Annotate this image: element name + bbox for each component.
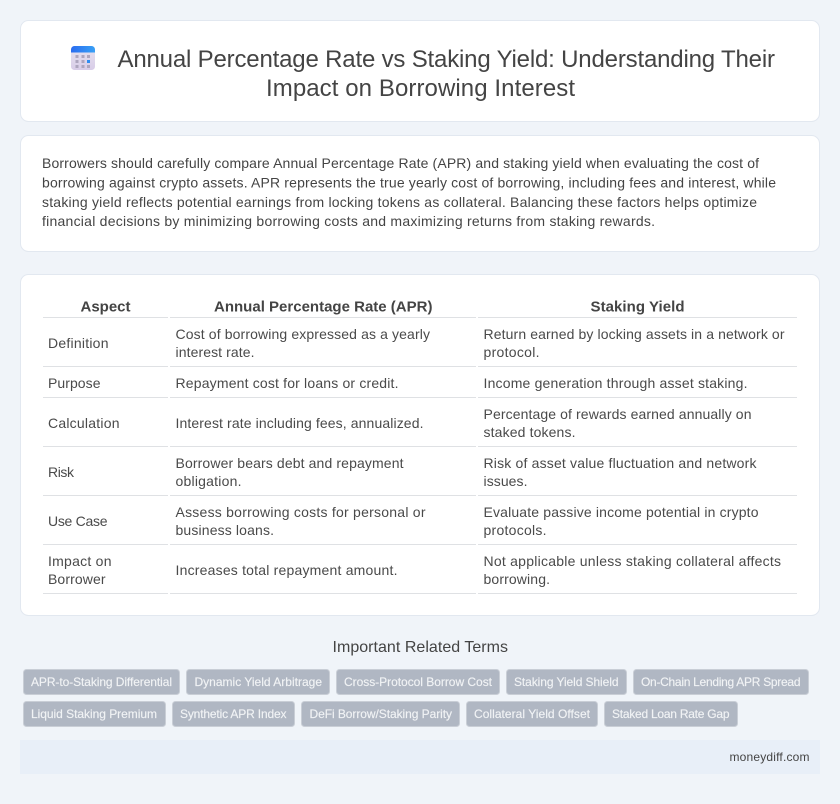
row: impact on borrower: Increases total repayment amount.: [176, 562, 398, 578]
tag: [604, 702, 738, 726]
table header: Staking Yield: [590, 298, 684, 316]
panel: header card: [20, 20, 820, 122]
tag: [466, 702, 598, 726]
table header: Annual Percentage Rate (APR): [214, 298, 432, 316]
row: impact on borrower: Impact on: [48, 553, 112, 569]
row: definition: interest rate.: [176, 344, 254, 360]
row: definition: Return earned by locking assets in a network or: [484, 326, 785, 342]
panel: intro text: borrowing against crypto assets. APR represents the true yearly cost of borrowing, including fees and interest, while: [42, 174, 776, 190]
row: use case: Assess borrowing costs for personal or: [176, 504, 426, 520]
panel: comparison table: [20, 274, 820, 616]
row: use case: Evaluate passive income potential in crypto: [484, 504, 759, 520]
row: risk: issues.: [484, 473, 528, 489]
row: calculation: [48, 406, 752, 440]
row: definition: [48, 326, 785, 360]
tag: [302, 702, 460, 726]
table header: Aspect: [80, 298, 130, 316]
tag: [336, 670, 500, 694]
row: use case: business loans.: [176, 522, 274, 538]
row: definition: protocol.: [484, 344, 540, 360]
footer: [20, 740, 820, 774]
panel: intro text: financial decisions by minimizing borrowing costs and maximizing returns from staking rewards.: [42, 213, 655, 229]
tag: On-Chain Lending APR Spread: [641, 675, 800, 689]
tag: [24, 702, 166, 726]
row: impact on borrower: [48, 553, 781, 587]
tag: [634, 670, 808, 694]
panel: intro text: staking yield reflects potential earnings from locking tokens as collateral. Balancing these factors helps optimize: [42, 194, 757, 210]
tag: DeFi Borrow/Staking Parity: [310, 707, 452, 721]
row: purpose: Repayment cost for loans or credit.: [176, 375, 398, 391]
row: risk: Risk: [48, 464, 75, 480]
heading: related terms: Important Related Terms: [332, 639, 508, 656]
tag: [24, 670, 180, 694]
title: [118, 46, 775, 102]
tag: [172, 702, 294, 726]
panel: intro text: Borrowers should carefully compare Annual Percentage Rate (APR) and staking yield when evaluating the cost of: [42, 155, 759, 171]
title: Annual Percentage Rate vs Staking Yield: Understanding Their: [118, 46, 775, 73]
tag: [506, 670, 626, 694]
row: calculation: Percentage of rewards earned annually on: [484, 406, 752, 422]
tag: Synthetic APR Index: [180, 707, 286, 721]
row: risk: Borrower bears debt and repayment: [176, 455, 404, 471]
footer credit: moneydiff.com: [730, 750, 810, 764]
tag: APR-to-Staking Differential: [31, 675, 172, 689]
tag: Staked Loan Rate Gap: [612, 707, 730, 721]
tag: Staking Yield Shield: [514, 675, 618, 689]
row: calculation: Calculation: [48, 415, 120, 431]
row: impact on borrower: borrowing.: [484, 571, 550, 587]
tag: Dynamic Yield Arbitrage: [194, 675, 322, 689]
row: risk: [48, 455, 758, 489]
row: purpose: Purpose: [48, 375, 101, 391]
icon: calendar: [71, 46, 95, 70]
row: use case: Use Case: [48, 513, 108, 529]
row: use case: [48, 504, 759, 538]
row: definition: Definition: [48, 335, 108, 351]
related term tags: [24, 670, 808, 726]
row: risk: obligation.: [176, 473, 242, 489]
row: purpose: [48, 375, 748, 391]
row: impact on borrower: Borrower: [48, 571, 106, 587]
row: definition: Cost of borrowing expressed as a yearly: [176, 326, 430, 342]
tag: Liquid Staking Premium: [31, 707, 157, 721]
title: Impact on Borrowing Interest: [266, 75, 575, 102]
tag: Collateral Yield Offset: [474, 707, 591, 721]
row: risk: Risk of asset value fluctuation and network: [484, 455, 758, 471]
row: calculation: staked tokens.: [484, 424, 576, 440]
row: calculation: Interest rate including fees, annualized.: [176, 415, 424, 431]
table header: [80, 298, 684, 316]
row: use case: protocols.: [484, 522, 546, 538]
tag: [186, 670, 330, 694]
tag: Cross-Protocol Borrow Cost: [344, 675, 493, 689]
panel: intro text: [20, 136, 820, 252]
row: purpose: Income generation through asset staking.: [484, 375, 748, 391]
row: impact on borrower: Not applicable unless staking collateral affects: [484, 553, 781, 569]
